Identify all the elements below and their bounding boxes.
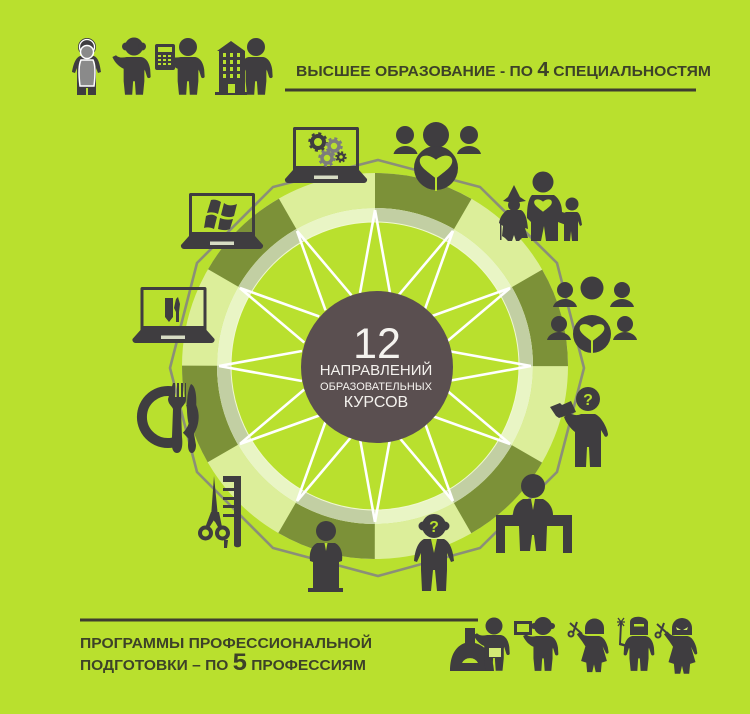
center circle with label [301,291,453,443]
white star spokes [219,210,531,522]
bottom heading [80,634,372,676]
icon: family with grandmother, man with heart, child [499,172,582,241]
outer ring with 12 alternating segments [200,190,550,542]
icon: person with book and question mark [550,387,608,467]
top icon: woman outlined [72,38,101,95]
center circle with label: ОБРАЗОВАТЕЛЬНЫХ [320,381,433,393]
bottom icon: woman with mask and scissors [656,618,697,674]
bottom icon: welder [617,617,654,671]
wheel diagram [170,160,584,576]
icon: person at desk [496,474,572,553]
icon: group of five people with heart [547,276,637,354]
top icon: person with building [215,38,273,95]
bottom heading: ПРОГРАММЫ ПРОФЕССИОНАЛЬНОЙ [80,634,372,652]
icon: plate with fork and knife [142,383,196,453]
icon: person with book and question mark: ? [583,392,593,409]
center circle with label: НАПРАВЛЕНИЙ [320,361,432,379]
bottom icon: person with screen [516,617,558,671]
icon: person with headset and question mark [414,514,454,591]
icon: three people with heart [394,122,481,191]
bottom icon: baker with oven [450,618,510,671]
icon: person with headset and question mark: ? [429,519,439,536]
center circle with label: КУРСОВ [344,394,408,411]
icon: scissors and comb [200,476,241,548]
gray 12-sided outline [170,160,584,576]
top icon: person with calculator [155,38,205,95]
icon: laptop with pen and marker [132,287,215,343]
top heading rule [285,88,696,92]
bottom icon: woman with scissors [568,618,609,672]
inner ring [224,215,526,517]
bottom heading rule [80,618,478,622]
icon: laptop with gears [285,127,367,183]
top icon: person with headset [112,38,151,95]
icon: person at podium [308,521,343,592]
top heading: ВЫСШЕЕ ОБРАЗОВАНИЕ - ПО 4 СПЕЦИАЛЬНОСТЯМ [296,59,711,81]
bottom heading: ПОДГОТОВКИ – ПО 5 ПРОФЕССИЯМ [80,649,366,676]
icon: laptop with windows logo [181,193,263,249]
center circle with label: 12 [353,320,401,368]
